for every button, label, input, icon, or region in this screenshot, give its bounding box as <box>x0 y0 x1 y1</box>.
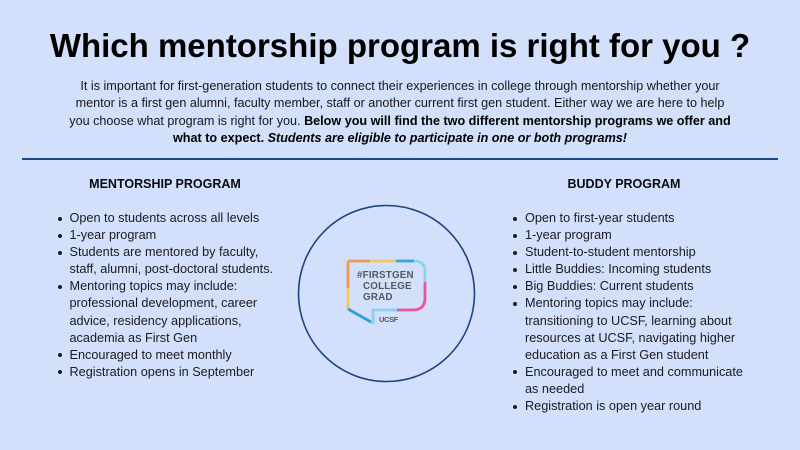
list: buddy program: Registration is open year round <box>525 399 701 413</box>
list: mentorship program <box>58 211 273 379</box>
list: mentorship program: staff, alumni, post-doctoral students. <box>70 262 273 276</box>
list: buddy program: transitioning to UCSF, learning about <box>525 314 732 328</box>
intro text: you choose what program is right for you. Below you will find the two different mentorship programs we offer and <box>69 114 731 128</box>
list: mentorship program: advice, residency applications, <box>70 314 242 328</box>
title: Which mentorship program is right for you ? <box>50 27 750 64</box>
heading: mentorship program: MENTORSHIP PROGRAM <box>89 177 241 191</box>
list: buddy program: Student-to-student mentorship <box>525 245 696 259</box>
list: mentorship program: Encouraged to meet monthly <box>70 348 232 362</box>
UCSF mark: UCSF <box>379 315 399 324</box>
logo text: #FIRSTGEN <box>357 270 414 281</box>
divider <box>22 158 778 160</box>
logo badge <box>298 204 476 382</box>
logo text: GRAD <box>363 292 393 303</box>
list: buddy program: resources at UCSF, navigating higher <box>525 331 735 345</box>
list: mentorship program: Mentoring topics may include: <box>70 279 237 293</box>
logo text <box>357 270 414 303</box>
list: mentorship program: professional development, career <box>70 296 257 310</box>
list: buddy program: Encouraged to meet and communicate <box>525 365 743 379</box>
list: buddy program <box>513 211 743 413</box>
list: mentorship program: 1-year program <box>70 228 156 242</box>
list: buddy program: Big Buddies: Current students <box>525 279 694 293</box>
list: mentorship program: Students are mentored by faculty, <box>70 245 258 259</box>
list: buddy program: Mentoring topics may include: <box>525 296 693 310</box>
intro text: mentor is a first gen alumni, faculty member, staff or another current first gen student. Either way we are here to help <box>76 96 724 110</box>
list: buddy program: education as a First Gen student <box>525 348 708 362</box>
list: mentorship program: Registration opens in September <box>70 365 254 379</box>
icon: speech bubble logo <box>348 261 425 323</box>
list: mentorship program: academia as First Gen <box>70 331 197 345</box>
heading: buddy program: BUDDY PROGRAM <box>568 177 680 191</box>
circle outline <box>298 206 474 382</box>
list: buddy program: Little Buddies: Incoming students <box>525 262 711 276</box>
list: buddy program: 1-year program <box>525 228 612 242</box>
intro text: It is important for first-generation students to connect their experiences in college through mentorship whether your <box>80 79 720 93</box>
intro text: what to expect. Students are eligible to participate in one or both programs! <box>173 131 627 145</box>
list: buddy program: as needed <box>525 382 584 396</box>
list: mentorship program: Open to students across all levels <box>70 211 259 225</box>
list: buddy program: Open to first-year students <box>525 211 674 225</box>
logo text: COLLEGE <box>363 281 412 292</box>
intro text <box>69 79 731 145</box>
